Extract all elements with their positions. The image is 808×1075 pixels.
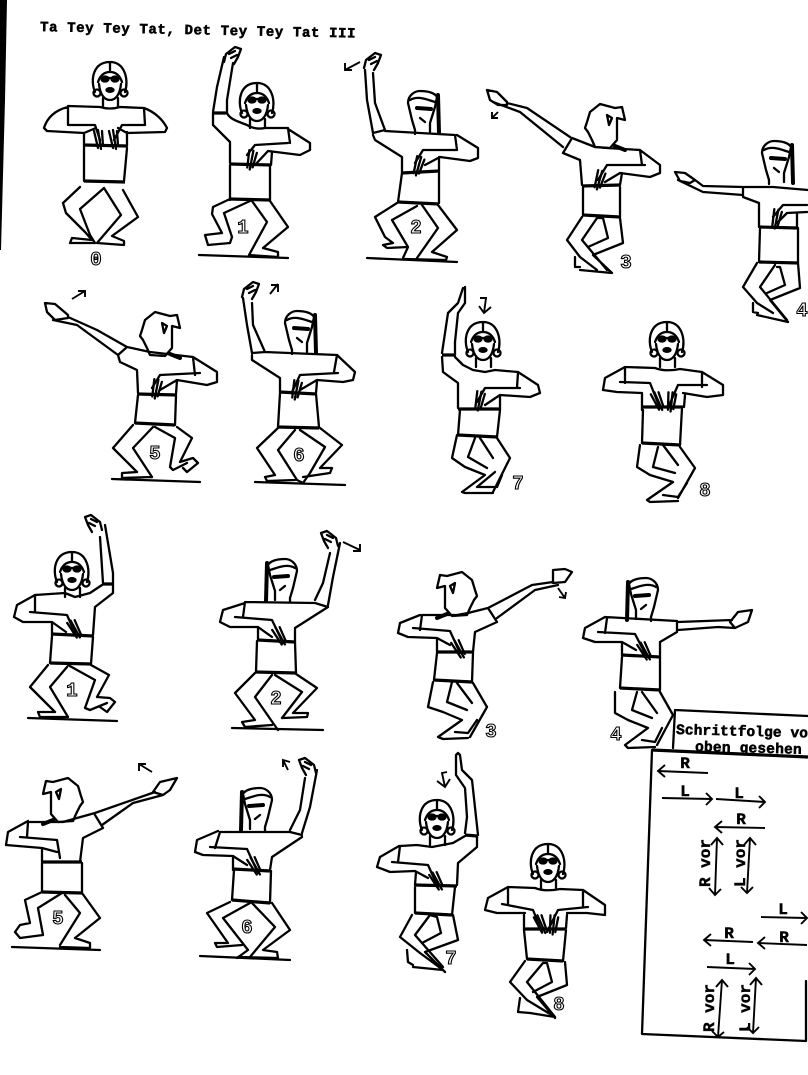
figure: row 4 step 5 [6,764,177,950]
arrow [72,291,85,299]
step labels: L vor [732,839,750,887]
step number: 1 [237,217,249,239]
step number: 2 [410,217,422,239]
step number: 8 [699,480,711,502]
step labels: L vor [737,984,755,1032]
panel: footwork sequence seen from above [642,710,808,1041]
figure: row 2 step 7 [442,287,540,495]
step labels: R [736,811,746,829]
figure: row 4 step 7 [377,753,478,972]
figure: row 3 step 2 [220,531,360,730]
panel subheading: oben gesehen [695,740,802,759]
step number: 6 [241,917,253,939]
step number: 4 [796,300,808,322]
arrow [492,112,498,118]
step labels: R [779,929,789,947]
step labels [680,755,789,1032]
step number: 7 [445,948,457,970]
step number: 4 [610,724,622,746]
step number: 3 [485,721,497,743]
figure: row 1 step 3 [487,90,660,274]
figure: row 4 step 8 [485,844,605,1018]
step number: 0 [90,249,102,271]
figure: row 2 step 6 [242,282,355,485]
arrow [139,764,152,772]
figure: row 1 step 2 [345,53,478,262]
step number: 2 [270,688,282,710]
figure: row 1 step 4 [675,141,808,322]
arrow [479,298,491,313]
panel heading: Schrittfolge vo [676,723,808,742]
figure: row 1 step 1 [199,47,310,258]
step number: 7 [512,473,524,495]
arrow [270,284,278,294]
arrow [558,588,566,598]
figure: row 3 step 3 [398,569,572,743]
arrow [345,62,360,70]
step labels: L [778,901,788,919]
step number: 5 [149,443,161,465]
step number: 6 [293,445,305,467]
arrow [437,772,450,787]
figure: row 4 step 6 [195,758,317,960]
title: Ta Tey Tey Tat, Det Tey Tey Tat III [40,20,356,43]
step number: 1 [66,680,78,702]
figure: row 3 step 4 [583,578,752,748]
step labels: R [680,755,690,773]
step number: 8 [553,994,565,1016]
step labels: L [734,785,744,803]
figure: row 2 step 5 [45,291,217,482]
step number: 3 [620,252,632,274]
figure: row 3 step 1 [14,515,117,721]
step labels: R vor [697,839,715,887]
figure: row 1 step 0 [44,62,167,271]
figure: row 2 step 8 [603,322,723,502]
arrow [343,542,360,551]
arrow [283,760,290,770]
step number: 5 [52,908,64,930]
step labels: L [680,783,690,801]
scan edge band [0,0,7,250]
step labels: R [724,925,734,943]
step arrows [658,765,807,1037]
step labels: R vor [701,984,719,1032]
step labels: L [725,951,735,969]
panel frame [642,710,808,1041]
